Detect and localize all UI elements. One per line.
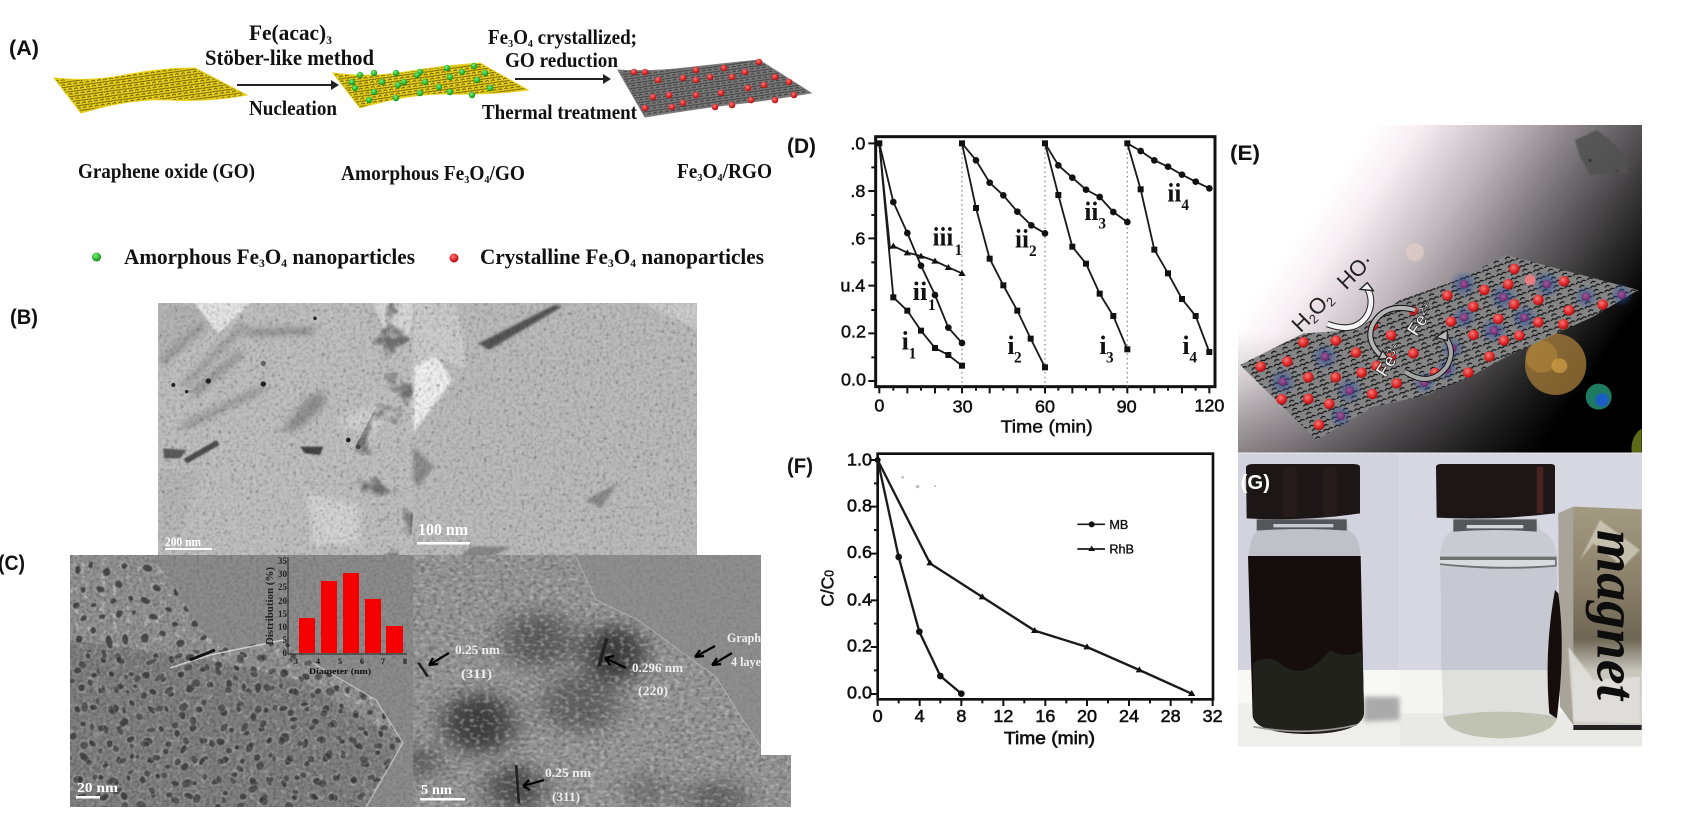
y tick labels: 0.0 [841,369,866,389]
red particles [1255,264,1608,430]
sheet: amorphous Fe3O4 on GO [333,63,528,108]
caption: RGO: Fe [677,159,699,183]
legend: crystalline nanoparticles: 3 [608,256,614,270]
plot frame [878,454,1213,699]
x tick labels: 28 [1161,706,1181,726]
caption: amorphous: /GO [489,161,525,185]
panel label F: (F) [787,455,813,478]
purple particles [1278,280,1626,420]
panel D: cycling degradation chart [840,133,1224,436]
series labels [902,179,1197,367]
legend MB: MB [1109,518,1128,532]
panel label A: (A) [9,37,39,60]
label layers cropped: 4 laye [731,654,761,669]
label 0.25 nm lower: 0.25 nm [545,765,591,780]
x tick labels: 120 [1194,396,1224,416]
step 2 text line one: Fe [488,25,510,49]
panel G: magnetic separation photo [1238,453,1646,747]
x tick labels: 16 [1035,706,1055,726]
y tick labels: .6 [850,228,865,248]
series labels: 1 [955,242,962,259]
series labels: 2 [1014,350,1022,367]
y tick labels: 0.0 [847,683,872,703]
y tick labels: 0.2 [847,635,872,655]
series i lines [879,143,1209,367]
x tick labels: 0 [873,706,883,726]
x tick labels: 30 [953,397,973,417]
scale bar 100 nm [417,524,470,544]
panel F: MB and RhB degradation chart [817,450,1223,748]
gradient background [1238,125,1642,453]
H2O2 label: O [1303,291,1333,321]
step 2 text line one: 4 [528,38,533,50]
legend: amorphous nanoparticles: Amorphous Fe [124,244,264,269]
left vial with dark suspension [1246,464,1364,734]
inset histogram: 7 [381,657,385,666]
caption: amorphous: 3 [464,174,470,186]
step 2 text line two: GO reduction [505,48,618,72]
series labels: 2 [1029,243,1037,260]
purple particle glows [1269,270,1634,428]
left tile features [157,302,415,545]
x tick labels: 60 [1035,397,1055,417]
inset histogram: 35 [278,556,288,566]
scale bar 20 nm [76,783,118,798]
series labels: ii [1084,197,1098,226]
panel label D: (D) [787,135,816,158]
panel label G: (G) [1241,471,1270,494]
Fe2+ label: 2+ [1415,299,1434,318]
caption: RGO: 4 [718,172,723,184]
caption: graphene oxide: Graphene oxide (GO) [78,159,255,183]
inset histogram: Distribution (%) [265,567,276,645]
sheet: Fe3O4 on RGO [618,59,811,117]
scale bar 5 nm [420,785,465,800]
legend: amorphous nanoparticles: nanoparticles [287,244,415,269]
legend: amorphous nanoparticles: 3 [259,256,265,270]
y tick labels [847,450,872,703]
sheet: graphene oxide [54,68,247,113]
inset histogram: 20 [278,596,288,606]
x tick labels [873,706,1223,726]
x tick labels: 24 [1119,706,1139,726]
inset histogram [265,556,407,676]
label graphene cropped: Graph [727,630,762,645]
caption: RGO: /RGO [722,159,772,183]
x tick labels: 0 [874,396,884,416]
panel E: Fenton mechanism illustration [1238,125,1642,453]
H2O2 label: H [1287,308,1315,337]
lens flare green blue [1586,384,1612,410]
HO radical label: HO· [1332,248,1378,294]
dotted cycle separators [962,143,1127,387]
caption: RGO: O [702,159,718,183]
label 0.25 nm upper: 0.25 nm [455,642,500,657]
inset histogram: 15 [278,609,288,619]
axis ticks [871,460,1213,706]
x axis title: Time (min) [1001,416,1093,436]
scale bar 200 nm: 200 nm [165,534,201,549]
caption: amorphous: O [469,161,484,185]
step 1 method text: Stöber-like method [205,45,374,70]
cycle arrows [1327,288,1451,379]
series labels: i [1007,331,1015,360]
lens flare orange [1525,334,1586,395]
inset histogram: 25 [278,582,288,592]
series labels: 4 [1189,350,1197,367]
Fe3+ label: Fe [1371,351,1401,381]
x tick labels: 4 [915,706,925,726]
arrow: step one [237,80,339,90]
legend RhB [1077,543,1134,557]
RhB curve [878,460,1195,696]
y tick labels: 0.6 [847,542,872,562]
legend MB [1077,518,1128,532]
inset histogram: 8 [403,657,407,666]
lattice marks [418,638,607,803]
legend: crystalline nanoparticles: 4 [630,256,636,270]
y tick labels: 1.0 [847,450,872,470]
inset histogram: 0 [282,648,288,658]
y tick labels: .8 [850,181,865,201]
x tick labels [874,396,1224,417]
magnet block [1548,507,1646,730]
inset histogram: 5 [338,657,342,666]
series labels: ii [913,277,927,306]
inset histogram: 4 [316,657,320,666]
arrow: step two [515,74,611,84]
yellow arc corner [1631,428,1642,453]
circle markers [890,148,1213,346]
faint flare [1406,243,1424,261]
legend: crystalline nanoparticles: O [614,244,630,269]
left micrograph [70,555,413,807]
inset histogram: 6 [360,657,364,666]
series labels: i [1099,331,1107,360]
panel B: TEM micrograph [157,302,698,557]
y tick labels [840,133,866,389]
caption: amorphous: Amorphous Fe [341,161,475,185]
panel A: synthesis scheme [54,20,811,270]
right micrograph [403,555,791,815]
y tick labels: 0.8 [847,495,872,515]
step 1 reagents text: Fe(acac) [249,20,328,45]
H2O2 label: 2 [1324,295,1338,309]
step 2 text line one: O [513,25,528,49]
legend RhB: RhB [1109,543,1134,557]
x tick labels: 8 [956,706,966,726]
scale bar 5 nm: 5 nm [421,783,452,798]
series labels: 3 [1098,216,1106,233]
y axis title: C/C0 [817,570,837,607]
plot frame [876,137,1215,387]
y tick labels: u.4 [840,276,865,296]
y tick labels: 0.2 [841,322,866,342]
legend: crystalline nanoparticles: nanoparticles [636,244,764,269]
caption: amorphous: 4 [484,174,490,186]
panel label E: (E) [1230,142,1260,165]
scale bar 20 nm: 20 nm [77,781,118,796]
magnet label: magnet [1584,530,1646,701]
arrow heads [1360,283,1447,359]
axis ticks [868,143,1209,393]
y tick labels: 0.4 [847,589,872,609]
x axis title: Time (min) [1004,728,1095,748]
inset histogram: Diameter (nm) [309,667,371,676]
inset histogram: 10 [278,622,288,632]
caption: RGO: 3 [697,172,703,184]
step 1 reagents text: 3 [326,33,332,47]
panel label B: (B) [10,306,38,329]
label (220): (220) [638,683,668,698]
label 0.296 nm: 0.296 nm [632,660,683,675]
label (311) upper: (311) [461,666,492,681]
photo background [1238,453,1642,747]
series labels: i [902,326,909,355]
scale bar 200 nm [165,538,212,550]
label (311) lower: (311) [552,789,580,804]
thermal treatment text: Thermal treatment [482,100,637,124]
x tick labels: 32 [1203,706,1223,726]
top right blotch [1575,130,1628,175]
series labels: 3 [1106,350,1114,367]
x tick labels: 20 [1077,706,1097,726]
MB curve [875,457,965,697]
series labels: ii [1015,225,1029,254]
series labels: ii [1167,179,1181,208]
legend: crystalline nanoparticles: Crystalline Fe [480,244,613,269]
H2O2 label: 2 [1306,312,1321,327]
legend: amorphous nanoparticles: O [265,244,281,269]
Fe3+ label: 3+ [1383,340,1403,359]
inset histogram: 3 [294,657,298,666]
right tile features [413,303,698,557]
series labels: i [1182,331,1190,360]
scale bar 100 nm: 100 nm [418,520,468,539]
square markers [876,140,1212,370]
step 2 text line one: crystallized; [533,25,637,49]
panel C: HRTEM micrographs [70,555,791,807]
nucleation text: Nucleation [249,96,337,120]
inset histogram: 30 [278,569,288,579]
series labels: 1 [909,345,916,362]
black arrows [429,646,732,790]
legend: amorphous nanoparticles: 4 [281,256,287,270]
legend: amorphous nanoparticles [92,244,415,270]
y tick labels: .0 [850,133,865,153]
inset histogram: 5 [282,635,288,645]
x tick labels: 90 [1117,397,1137,417]
Fe2+ label: Fe [1402,310,1432,340]
graphene sheet [1240,255,1638,440]
x tick labels: 12 [993,706,1013,726]
legend: crystalline nanoparticles [450,244,764,270]
triangle markers [890,243,966,276]
right vial with clear water [1436,464,1558,738]
faint specks [901,476,936,488]
series labels: 1 [928,297,936,314]
step 2 text line one: 3 [508,38,514,50]
series labels: 4 [1181,197,1189,214]
central mottled fold [350,303,415,555]
series labels: iii [933,223,953,252]
